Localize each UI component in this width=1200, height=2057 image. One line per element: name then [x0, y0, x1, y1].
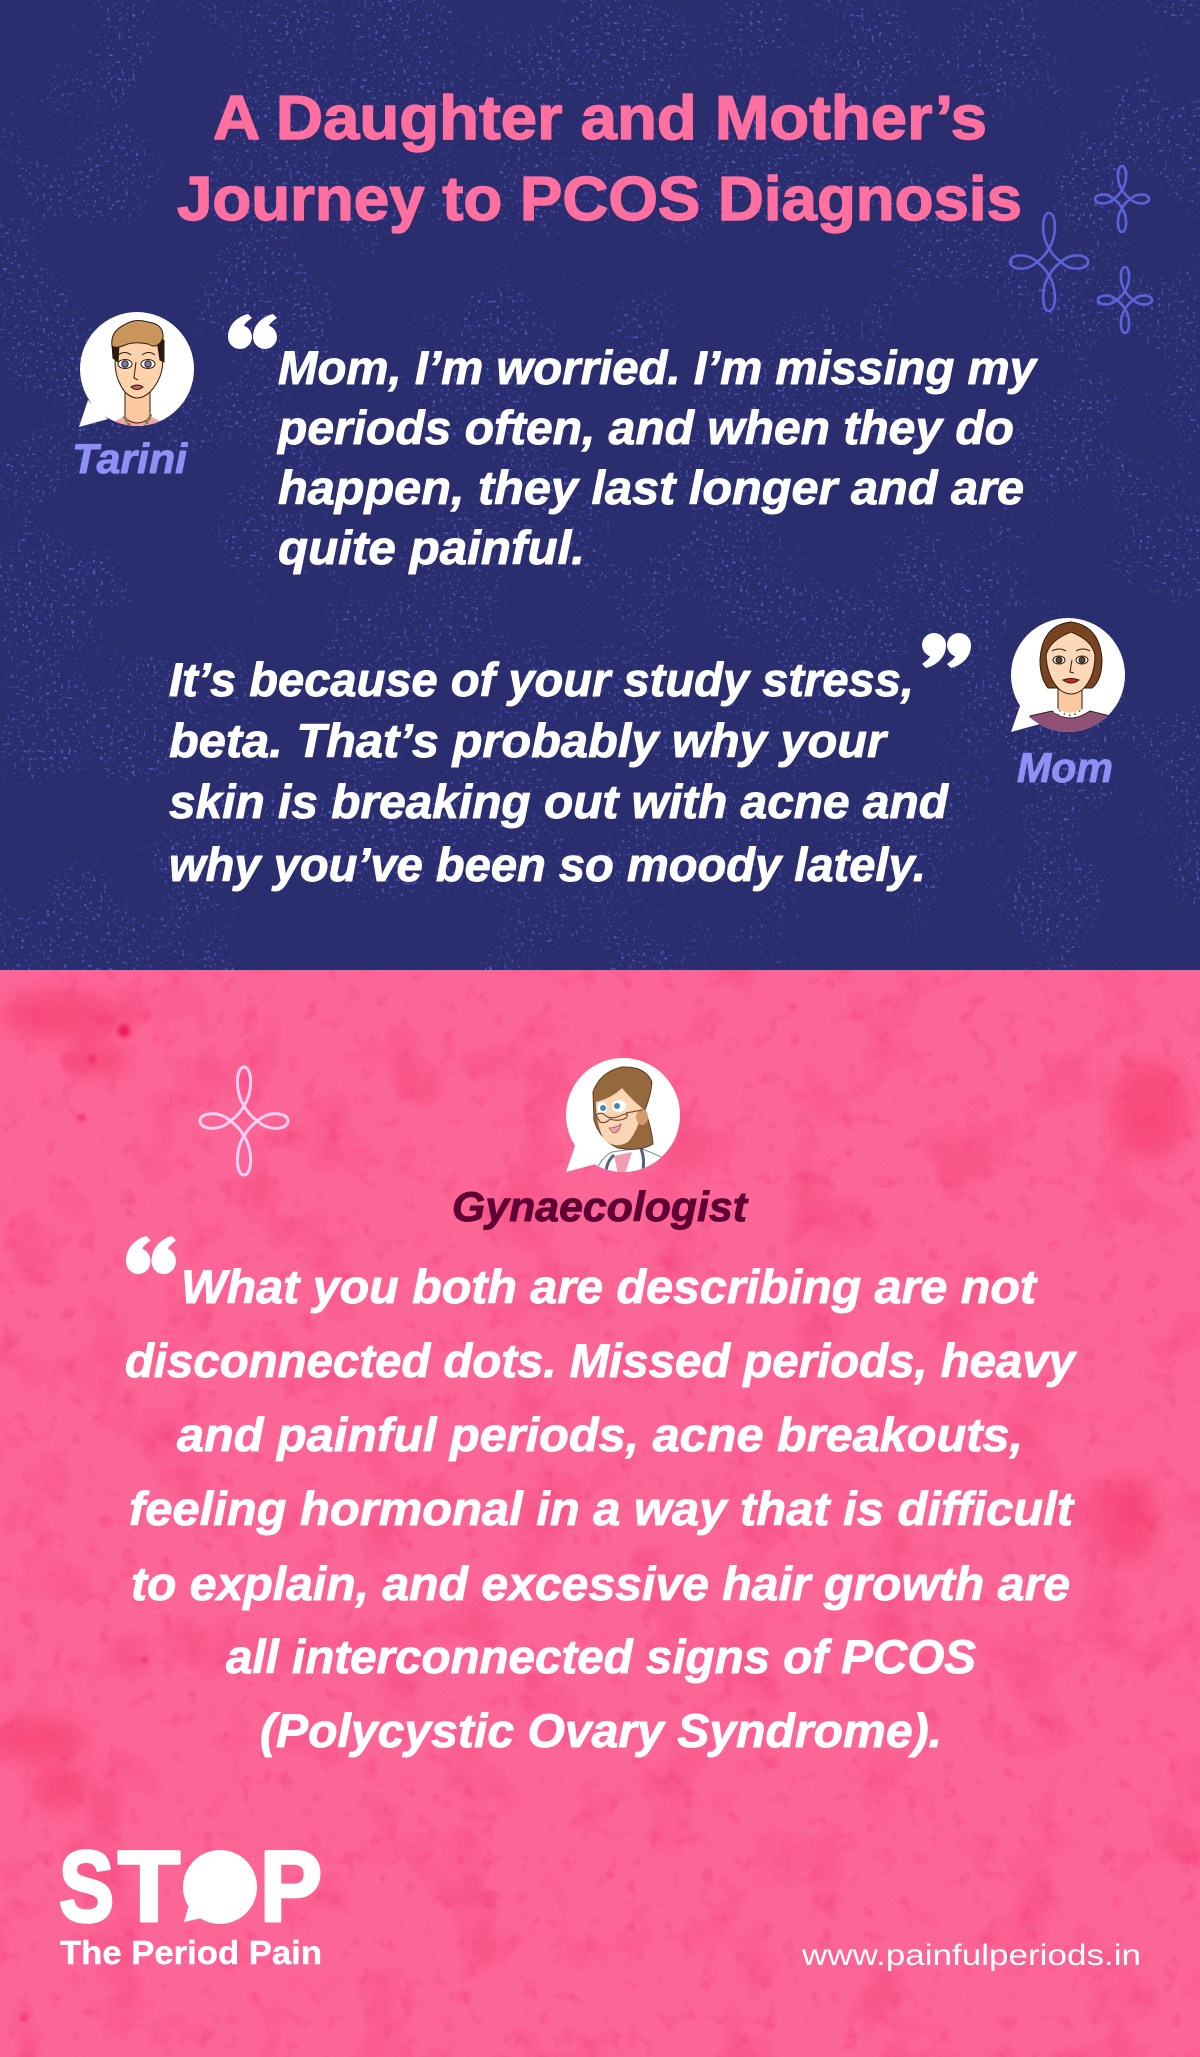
avatar: Mom [1011, 618, 1125, 735]
quote: Tarini: happen, they last longer and are [278, 461, 1024, 514]
label: Tarini: Tarini [72, 435, 188, 482]
quote: Mom: It’s because of your study stress, [169, 653, 914, 706]
logo: Stop The Period Pain: T [118, 1831, 180, 1943]
title: Journey to PCOS Diagnosis [177, 165, 1022, 234]
title: A Daughter and Mother’s [213, 84, 987, 153]
logo: Stop The Period Pain: The Period Pain [60, 1934, 322, 1971]
quote: Gynaecologist: disconnected dots. Missed periods, heavy [125, 1334, 1078, 1387]
quote: Tarini: Mom, I’m worried. I’m missing my [278, 341, 1039, 394]
quote: Gynaecologist: to explain, and excessive hair growth are [131, 1557, 1070, 1610]
quote: Gynaecologist: feeling hormonal in a way that is difficult [129, 1482, 1075, 1535]
quote: Mom: beta. That’s probably why your [169, 714, 889, 767]
logo: Stop The Period Pain: O [186, 1831, 254, 1943]
label: Gynaecologist: Gynaecologist [452, 1183, 749, 1230]
icon: closing quote [922, 633, 971, 668]
website url: www.painfulperiods.in [801, 1939, 1141, 1972]
logo: Stop The Period Pain: P [260, 1831, 322, 1943]
quote: Gynaecologist: (Polycystic Ovary Syndrome). [260, 1704, 942, 1757]
quote: Mom [169, 653, 949, 891]
quote: Gynaecologist: What you both are describing are not [181, 1260, 1038, 1313]
icon: doctor opening quote [126, 1236, 176, 1274]
icon: decorative sparkles [1010, 166, 1152, 333]
quote: Tarini: periods often, and when they do [276, 401, 1014, 454]
quote: Tarini [276, 341, 1039, 574]
label: Mom: Mom [1017, 744, 1113, 791]
avatar: Gynaecologist [566, 1058, 680, 1180]
logo: Stop The Period Pain: S [59, 1831, 114, 1943]
quote: Gynaecologist: all interconnected signs of PCOS [226, 1630, 976, 1683]
quote: Mom: skin is breaking out with acne and [169, 775, 949, 828]
quote: Tarini: quite painful. [278, 521, 585, 574]
logo: Stop The Period Pain [59, 1831, 322, 1971]
quote: Mom: why you’ve been so moody lately. [169, 838, 926, 891]
icon: pink sparkle [200, 1067, 288, 1175]
icon: opening quote [228, 314, 277, 349]
quote: Gynaecologist [125, 1260, 1078, 1757]
quote: Gynaecologist: and painful periods, acne breakouts, [177, 1408, 1023, 1461]
avatar: Tarini [79, 312, 194, 428]
title [177, 84, 1022, 234]
